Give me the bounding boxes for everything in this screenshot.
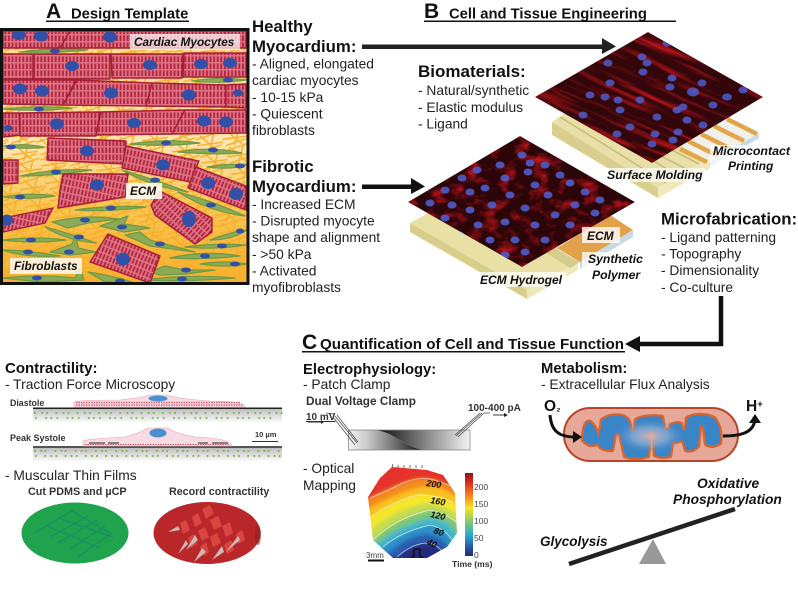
arrow: H+ out — [723, 398, 763, 436]
labels: surface molding and microcontact printing: Printing — [728, 159, 774, 173]
text: microfabrication: Microfabrication: — [661, 210, 797, 228]
heading: B Cell and Tissue Engineering: B — [424, 0, 439, 23]
color scale: 50 — [474, 533, 484, 543]
panel labels: Cardiac Myocytes — [134, 35, 235, 49]
substrate peak systole — [33, 446, 282, 462]
color scale: 200 — [474, 482, 488, 492]
text: muscular thin films — [5, 468, 269, 498]
text: healthy myocardium: Myocardium: — [252, 37, 356, 56]
text: microfabrication: - Dimensionality — [661, 263, 759, 278]
arrow: H+ out: + — [757, 399, 763, 410]
arrow: H+ out: H — [746, 398, 757, 415]
text: healthy myocardium: cardiac myocytes — [252, 73, 359, 88]
labels: surface molding and microcontact printing — [606, 144, 792, 182]
chart: optical mapping activation map: 200 — [425, 478, 442, 490]
icon: green PDMS disc — [22, 502, 128, 564]
panel labels: ECM — [130, 184, 157, 198]
chart: optical mapping activation map: 80 — [432, 525, 445, 538]
text: fibrotic myocardium: Myocardium: — [252, 177, 356, 196]
diagram: dual voltage clamp — [306, 403, 521, 450]
text: fibrotic myocardium: - Increased ECM — [252, 197, 356, 212]
heading: A Design Template: Design Template — [71, 6, 188, 22]
text: electrophysiology — [303, 362, 436, 408]
icon: red contracting films — [154, 502, 261, 564]
text: muscular thin films: - Muscular Thin Films — [5, 468, 137, 483]
text: metabolism — [541, 361, 710, 392]
text: metabolism: Metabolism: — [541, 361, 627, 377]
heading: B Cell and Tissue Engineering — [424, 0, 676, 23]
chart: optical mapping activation map: 3mm — [366, 551, 384, 560]
arrow: healthy to aligned tissue — [362, 38, 616, 54]
text: healthy myocardium — [252, 17, 374, 138]
diagram: metabolic balance seesaw: Phosphorylation — [673, 492, 782, 507]
text: fibrotic myocardium: Fibrotic — [252, 157, 314, 176]
text: electrophysiology: - Patch Clamp — [303, 377, 391, 392]
activation contours — [368, 467, 457, 558]
color scale — [452, 473, 493, 569]
fibroblasts — [3, 49, 247, 283]
panel labels: Fibroblasts — [14, 259, 78, 273]
labels: ECM hydrogel, ECM, synthetic polymer: Polymer — [592, 268, 641, 282]
text: fibrotic myocardium: shape and alignment — [252, 230, 380, 245]
labels: surface molding and microcontact printing: Surface Molding — [607, 168, 703, 182]
myocyte nuclei — [1, 30, 243, 266]
text: fibrotic myocardium: myofibroblasts — [252, 280, 341, 295]
text: healthy myocardium: - Aligned, elongated — [252, 56, 374, 72]
text: biomaterials: - Ligand — [418, 116, 468, 132]
text: optical mapping: Mapping — [303, 478, 356, 493]
text: electrophysiology: Dual Voltage Clamp — [306, 394, 416, 408]
heading: A Design Template: A — [46, 0, 61, 23]
chart: optical mapping activation map: 40 — [424, 536, 438, 550]
labels: ECM hydrogel, ECM, synthetic polymer: ECM Hydrogel — [480, 273, 563, 287]
arrow: microfabrication to quantification — [625, 296, 721, 352]
text: microfabrication: - Co-culture — [661, 280, 733, 295]
diagram: traction force microscopy: Peak Systole — [10, 433, 66, 443]
diagram: traction force microscopy: Diastole — [10, 398, 44, 408]
diagram: metabolic balance seesaw — [540, 476, 782, 564]
diagram: microfabricated substrate — [552, 90, 759, 198]
heading: C Quantification of Cell and Tissue Function — [302, 331, 625, 354]
chart: optical mapping activation map: 120 — [430, 509, 446, 522]
text: microfabrication: - Ligand patterning — [661, 230, 776, 245]
text: microfabrication: - Topography — [661, 246, 741, 262]
chart: optical mapping activation map — [366, 464, 492, 568]
diagram: metabolic balance seesaw: Glycolysis — [540, 534, 608, 549]
text: fibrotic myocardium: - Activated — [252, 264, 316, 278]
text: biomaterials: Biomaterials: — [418, 62, 526, 81]
labels: surface molding and microcontact printing: Microcontact — [713, 144, 791, 158]
text: contractility: Contractility: — [5, 360, 98, 377]
text: healthy myocardium: Healthy — [252, 17, 313, 36]
text: muscular thin films: Record contractility — [169, 486, 269, 498]
text: fibrotic myocardium — [252, 157, 380, 295]
text: optical mapping — [303, 461, 356, 493]
arrow: fibrotic to disordered tissue — [362, 178, 425, 194]
text: biomaterials: - Elastic modulus — [418, 100, 523, 115]
chart: optical mapping activation map: 160 — [430, 495, 446, 508]
text: muscular thin films: Cut PDMS and µCP — [28, 486, 127, 498]
diagram: traction force microscopy — [10, 395, 282, 462]
text: biomaterials: - Natural/synthetic — [418, 83, 529, 98]
substrate diastole — [33, 408, 282, 423]
text: fibrotic myocardium: - Disrupted myocyte — [252, 214, 375, 228]
arrow: O2 in: O₂ — [544, 398, 561, 415]
labels: ECM hydrogel, ECM, synthetic polymer: Synthetic — [588, 252, 643, 266]
arrow: O2 in — [544, 398, 582, 443]
heading: C Quantification of Cell and Tissue Function: Quantification of Cell and Tissue Function — [320, 337, 624, 353]
text: healthy myocardium: fibroblasts — [252, 123, 315, 138]
text: healthy myocardium: - 10-15 kPa — [252, 90, 324, 105]
cardiac myocytes — [3, 31, 246, 184]
text: healthy myocardium: - Quiescent — [252, 106, 323, 122]
panel: design template illustration — [1, 29, 248, 284]
heading: C Quantification of Cell and Tissue Function: C — [302, 331, 317, 354]
text: fibrotic myocardium: - >50 kPa — [252, 247, 312, 262]
heading: B Cell and Tissue Engineering: Cell and Tissue Engineering — [449, 6, 647, 22]
color scale: 0 — [474, 550, 479, 560]
color scale: 150 — [474, 499, 488, 509]
diagram: layered hydrogel substrate — [410, 190, 633, 299]
color scale: Time (ms) — [452, 559, 493, 569]
text: electrophysiology: Electrophysiology: — [303, 362, 436, 378]
diagram: traction force microscopy: 10 µm — [255, 430, 277, 439]
heading: A Design Template — [46, 0, 189, 23]
text: metabolism: - Extracellular Flux Analysis — [541, 377, 710, 392]
diagram: mitochondrion — [544, 398, 763, 461]
text: microfabrication — [661, 210, 797, 295]
text: biomaterials — [418, 62, 529, 132]
color scale: 100 — [474, 516, 488, 526]
text: contractility: - Traction Force Microscopy — [5, 377, 175, 392]
panel labels — [10, 34, 240, 274]
diagram: metabolic balance seesaw: Oxidative — [697, 476, 759, 491]
text: optical mapping: - Optical — [303, 461, 354, 476]
diagram: dual voltage clamp: 100-400 pA — [468, 403, 521, 414]
labels: ECM hydrogel, ECM, synthetic polymer: ECM — [587, 229, 615, 243]
labels: ECM hydrogel, ECM, synthetic polymer — [479, 227, 644, 287]
micrograph: fibrotic tissue — [408, 136, 635, 267]
text: contractility — [5, 360, 175, 392]
micrograph: aligned cardiac tissue — [535, 32, 763, 163]
diagram: dual voltage clamp: 10 mV — [306, 412, 336, 423]
